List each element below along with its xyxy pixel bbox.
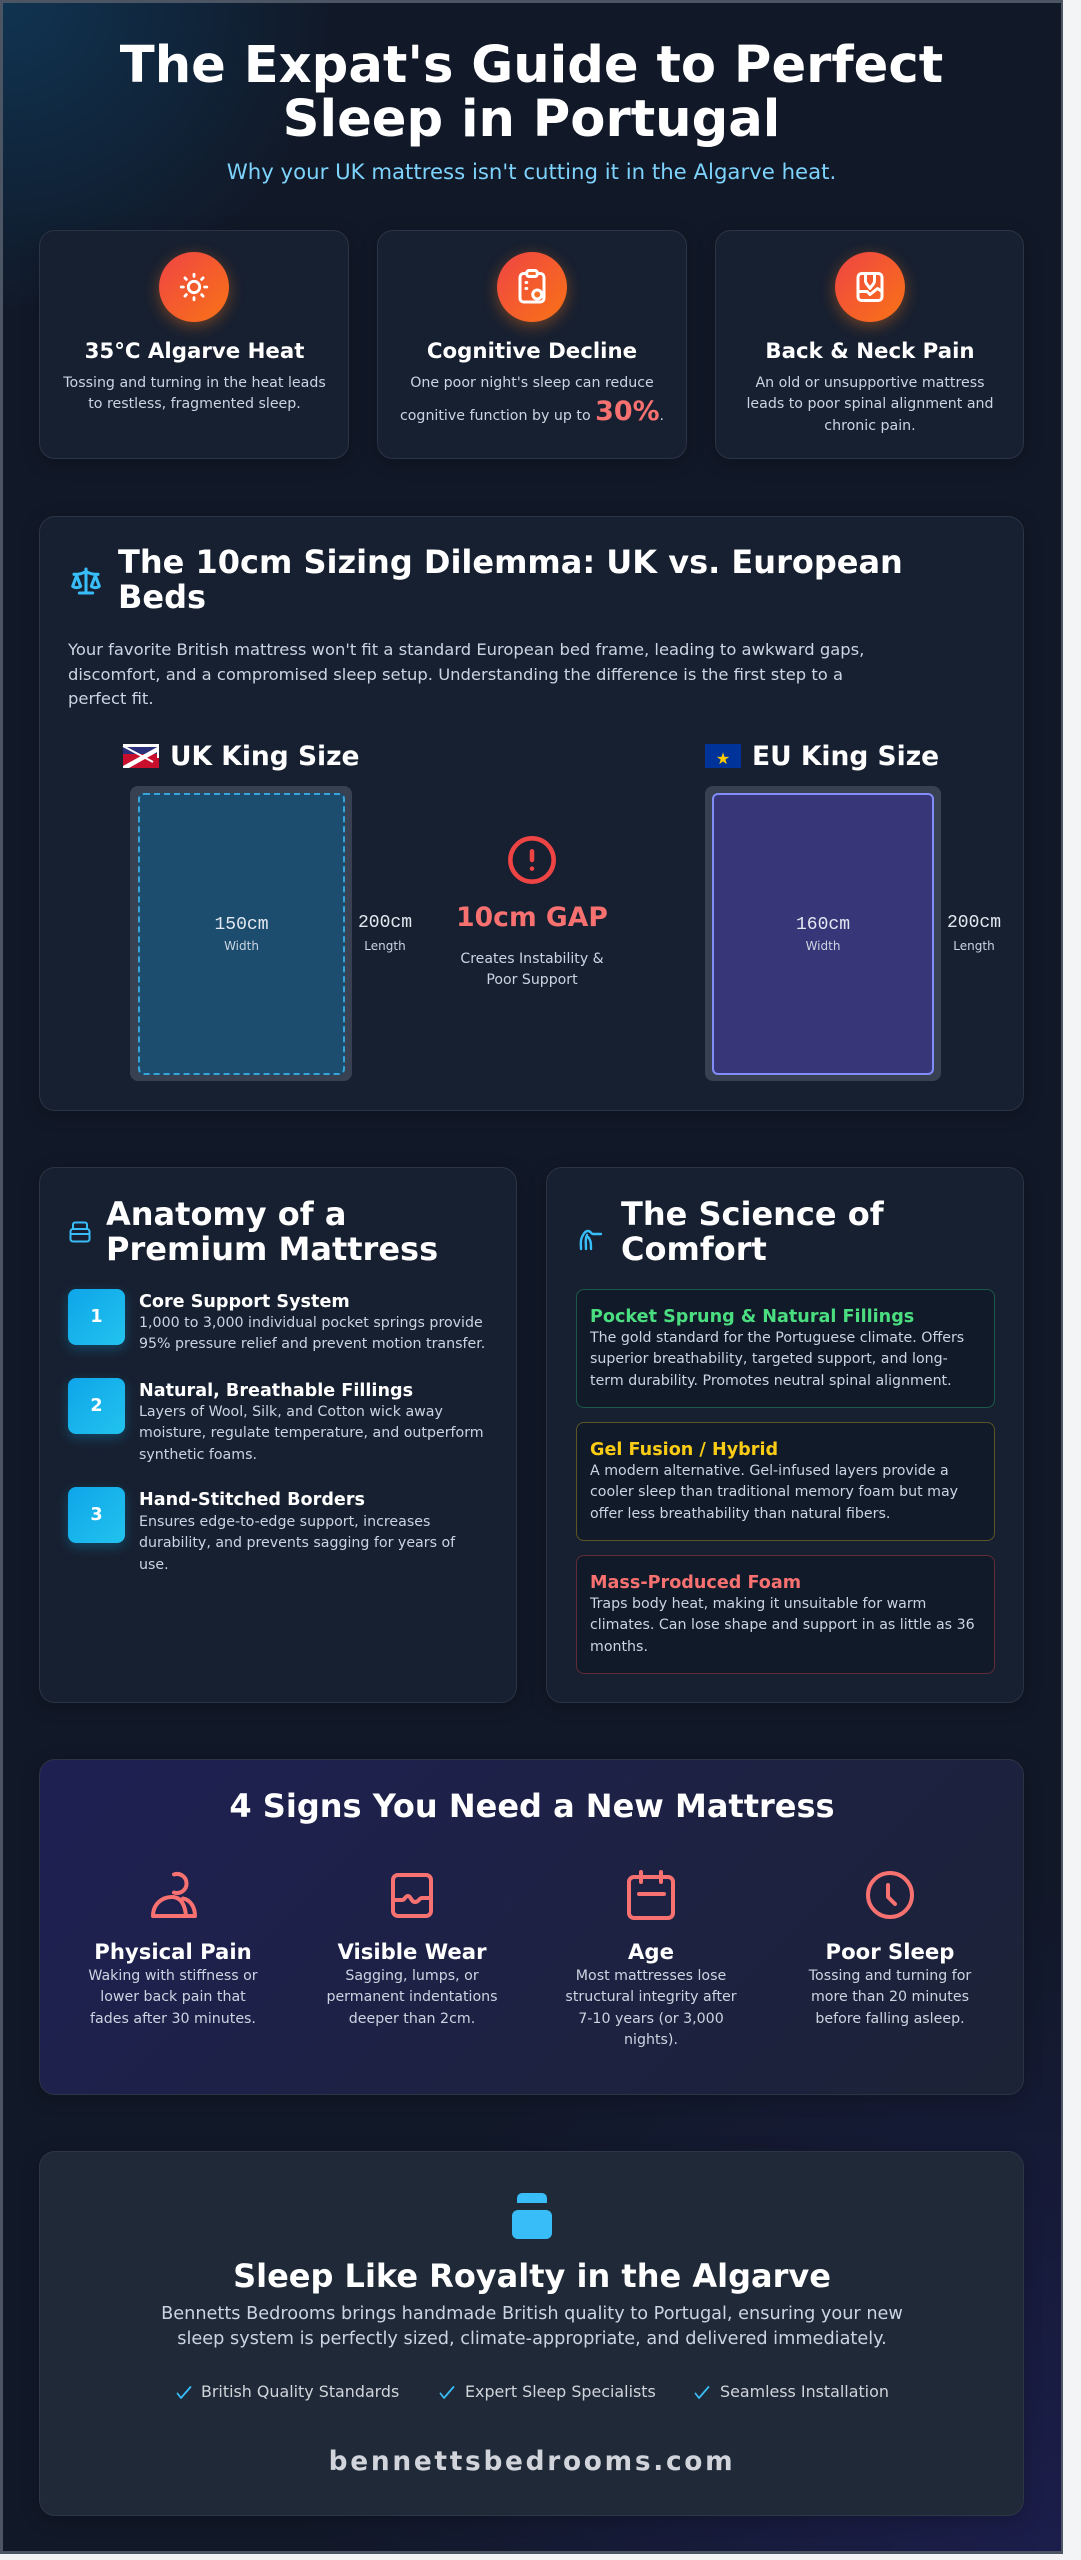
text: sizing intro [68, 640, 864, 708]
icon: bed [512, 2193, 552, 2239]
panel: sizing dilemma [39, 516, 1024, 1111]
text: physical pain: fades after 30 minutes. [90, 2011, 256, 2027]
title: core support: Core Support System [139, 1292, 350, 1312]
text: pocket sprung: term durability. Promotes neutral spinal alignment. [590, 1373, 952, 1389]
panel: four signs [39, 1759, 1024, 2095]
label: EU width [796, 915, 850, 953]
text: cognitive: cognitive function by up to 30%. [400, 396, 664, 427]
title: visible wear: Visible Wear [337, 1939, 487, 1964]
text: foam: climates. Can lose shape and support in as little as 36 [590, 1617, 975, 1633]
text: gel: cooler sleep than traditional memory foam but may [590, 1484, 958, 1500]
label: EU width: Width [806, 939, 840, 953]
badge: 3: 3 [90, 1505, 103, 1525]
label: UK width: Width [224, 939, 259, 953]
text: visible wear [326, 1968, 498, 2027]
title: age: Age [628, 1939, 674, 1964]
heading: EU king size: EU King Size [752, 741, 939, 772]
badge: 3 [68, 1487, 125, 1543]
text: fillings: synthetic foams. [139, 1447, 257, 1463]
text: gel [590, 1463, 958, 1522]
text: fillings: Layers of Wool, Silk, and Cotton wick away [139, 1404, 443, 1420]
title: pocket sprung: Pocket Sprung & Natural Fillings [590, 1307, 914, 1327]
label: UK length: 200cm [358, 913, 412, 933]
diagram: UK mattress [138, 793, 345, 1075]
icon: mattress outline [70, 1222, 90, 1242]
text: heat: to restless, fragmented sleep. [88, 396, 301, 412]
panel: anatomy [39, 1167, 517, 1703]
text: age: 7-10 years (or 3,000 [578, 2011, 724, 2027]
text: pocket sprung [590, 1330, 964, 1389]
text: physical pain [88, 1968, 258, 2027]
website: bennettsbedrooms.com [329, 2446, 735, 2477]
text: visible wear: Sagging, lumps, or [345, 1968, 479, 1984]
heading: pain: Back & Neck Pain [765, 339, 975, 364]
title: gel: Gel Fusion / Hybrid [590, 1440, 778, 1460]
icon: physical pain [151, 1872, 197, 1918]
panel: cognitive [377, 230, 687, 459]
icon: age [627, 1870, 675, 1920]
panel: heat [39, 230, 349, 459]
label: EU width: 160cm [796, 915, 850, 935]
heading: science: Comfort [621, 1230, 767, 1268]
text: foam: Traps body heat, making it unsuitable for warm [590, 1596, 926, 1612]
text: borders [139, 1514, 456, 1573]
icon: alert [508, 836, 556, 884]
text: sizing intro: Your favorite British mattress won't fit a standard European bed frame, leading to awkward gaps, [68, 640, 864, 659]
text: borders: durability, and prevents sagging for years of [139, 1535, 455, 1551]
heading: science: The Science of [621, 1195, 884, 1233]
text: borders: Ensures edge-to-edge support, increases [139, 1514, 430, 1530]
heading: anatomy [106, 1195, 438, 1268]
label: UK width: 150cm [214, 915, 268, 935]
benefit: quality: British Quality Standards [201, 2382, 399, 2401]
text: visible wear: permanent indentations [326, 1989, 498, 2005]
heading: sizing dilemma [118, 543, 903, 616]
text: call to action [161, 2304, 903, 2348]
text: pain: leads to poor spinal alignment and [746, 396, 994, 412]
text: cognitive: One poor night's sleep can reduce [410, 375, 654, 391]
text: gap note: Creates Instability & [460, 951, 604, 967]
icon: clipboard [497, 252, 567, 322]
icon: sun [159, 252, 229, 322]
text: visible wear: deeper than 2cm. [349, 2011, 475, 2027]
icon: UK flag [122, 744, 159, 768]
text: core support [139, 1315, 485, 1352]
card: foam [576, 1555, 995, 1674]
text: poor sleep: Tossing and turning for [809, 1968, 971, 1984]
diagram: UK bed frame [130, 786, 352, 1081]
text: heat [63, 375, 326, 412]
text: pain [746, 375, 994, 434]
text: age: Most mattresses lose [576, 1968, 726, 1984]
heading: sizing dilemma: Beds [118, 578, 206, 616]
icon: back [835, 252, 905, 322]
text: heat: Tossing and turning in the heat leads [63, 375, 326, 391]
label: EU length: 200cm [947, 913, 1001, 933]
icon: scale [71, 568, 101, 594]
text: poor sleep: before falling asleep. [815, 2011, 965, 2027]
title: borders: Hand-Stitched Borders [139, 1490, 365, 1510]
text: sizing intro: discomfort, and a compromised sleep setup. Understanding the difference is the first step to a [68, 664, 843, 684]
label: UK length [358, 913, 412, 953]
heading: science [621, 1195, 884, 1268]
text: call to action: sleep system is perfectly sized, climate-appropriate, and delivered immediately. [177, 2328, 887, 2348]
icon: poor sleep [866, 1871, 914, 1919]
text: age: structural integrity after [565, 1989, 737, 2005]
title: foam: Mass-Produced Foam [590, 1573, 801, 1593]
heading: call to action: Sleep Like Royalty in the Algarve [233, 2257, 831, 2295]
icon: comfort [580, 1230, 602, 1250]
heading: UK king size: UK King Size [170, 741, 360, 772]
diagram: EU bed frame [705, 786, 941, 1081]
text: pocket sprung: superior breathability, targeted support, and long- [590, 1351, 948, 1367]
text: core support: 1,000 to 3,000 individual pocket springs provide [139, 1315, 483, 1331]
text: sizing intro: perfect fit. [68, 689, 154, 708]
title: Sleep in Portugal [283, 89, 780, 149]
heading: anatomy: Premium Mattress [106, 1230, 438, 1268]
heading: sizing dilemma: The 10cm Sizing Dilemma: UK vs. European [118, 543, 903, 581]
callout: 10cm gap: 10cm GAP [456, 902, 608, 933]
text: pocket sprung: The gold standard for the Portuguese climate. Offers [590, 1330, 964, 1346]
heading: cognitive: Cognitive Decline [427, 339, 637, 364]
panel: call to action [39, 2151, 1024, 2516]
text: physical pain: lower back pain that [100, 1989, 246, 2005]
text: core support: 95% pressure relief and prevent motion transfer. [139, 1336, 485, 1352]
title: physical pain: Physical Pain [94, 1939, 252, 1964]
text: poor sleep [808, 1968, 972, 2027]
text: age [565, 1968, 737, 2048]
label: UK width [214, 915, 268, 953]
badge: 2 [68, 1378, 125, 1434]
label: EU length: Length [953, 939, 995, 953]
text: age: nights). [624, 2032, 678, 2048]
icon: EU flag: ★ [716, 749, 730, 768]
diagram: EU mattress [712, 793, 934, 1075]
text: physical pain: Waking with stiffness or [88, 1968, 258, 1984]
icon: visible wear [391, 1873, 433, 1918]
text: cognitive [400, 375, 664, 427]
text: fillings: moisture, regulate temperature, and outperform [139, 1425, 484, 1441]
card: pocket sprung [576, 1289, 995, 1408]
title: The Expat's Guide to Perfect [120, 35, 943, 95]
heading: anatomy: Anatomy of a [106, 1195, 346, 1233]
badge: 2: 2 [90, 1396, 103, 1416]
text: fillings [139, 1404, 484, 1463]
title: fillings: Natural, Breathable Fillings [139, 1381, 413, 1401]
text: call to action: Bennetts Bedrooms brings handmade British quality to Portugal, ensuring your new [161, 2304, 903, 2324]
label: UK length: Length [364, 939, 406, 953]
text: pain: An old or unsupportive mattress [755, 375, 985, 391]
benefit: experts: Expert Sleep Specialists [465, 2382, 656, 2401]
card: gel [576, 1422, 995, 1541]
title: poor sleep: Poor Sleep [826, 1939, 954, 1964]
heading: heat: 35°C Algarve Heat [85, 339, 304, 364]
heading: four signs: 4 Signs You Need a New Mattress [229, 1787, 835, 1825]
label: EU length [947, 913, 1001, 953]
text: foam: months. [590, 1639, 648, 1655]
text: foam [590, 1596, 975, 1655]
title [120, 35, 943, 149]
text: gel: offer less breathability than natural fibers. [590, 1506, 890, 1522]
panel: pain [715, 230, 1024, 459]
text: poor sleep: more than 20 minutes [811, 1989, 969, 2005]
badge: 1 [68, 1289, 125, 1345]
text: pain: chronic pain. [824, 418, 916, 434]
icon: EU flag [705, 744, 741, 768]
benefit: installation: Seamless Installation [720, 2382, 889, 2401]
badge: 1: 1 [90, 1307, 103, 1327]
subtitle: Why your UK mattress isn't cutting it in the Algarve heat. [227, 160, 836, 185]
text: gel: A modern alternative. Gel-infused layers provide a [590, 1463, 949, 1479]
text: gap note [460, 951, 604, 988]
text: gap note: Poor Support [486, 972, 578, 988]
panel: science of comfort [546, 1167, 1024, 1703]
text: borders: use. [139, 1557, 169, 1573]
